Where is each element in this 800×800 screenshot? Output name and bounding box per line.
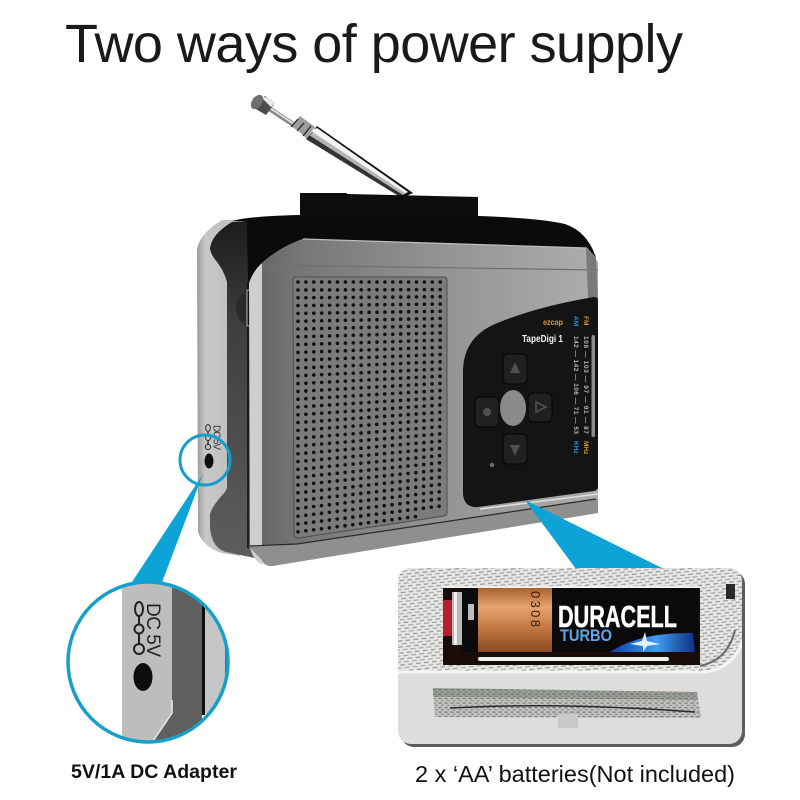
callout: DC jack xyxy=(68,435,230,745)
right bevel xyxy=(586,248,598,300)
AM FM scale: FM xyxy=(582,316,589,325)
button down xyxy=(503,434,527,464)
star xyxy=(630,632,660,652)
control panel xyxy=(463,297,598,507)
tuning dial bar xyxy=(592,335,595,437)
caption: batteries: 2 x ‘AA’ batteries(Not included) xyxy=(415,761,735,787)
indicator led xyxy=(490,463,494,467)
callout wedge xyxy=(130,474,203,585)
magnified jack circle xyxy=(68,580,230,745)
AM FM scale xyxy=(572,316,589,455)
magnifier ring small xyxy=(180,435,230,485)
callout wedge: battery xyxy=(525,500,664,569)
AM FM scale: MHz xyxy=(582,441,589,455)
black top shell xyxy=(232,215,596,282)
front top highlight xyxy=(303,239,587,248)
side panel silver xyxy=(197,220,240,556)
AM FM scale: AM xyxy=(572,316,579,326)
model name: TapeDigi 1 xyxy=(522,333,563,345)
front face xyxy=(262,239,598,566)
side black seam xyxy=(247,282,249,548)
AM FM scale: KHz xyxy=(572,441,579,454)
antenna xyxy=(248,93,413,198)
cassette door top xyxy=(300,193,478,222)
button record xyxy=(475,397,499,427)
front seam line xyxy=(262,265,598,270)
TURBO: TURBO xyxy=(560,626,612,645)
circuit strip xyxy=(433,688,701,728)
center button xyxy=(500,390,526,426)
metal cover texture xyxy=(398,568,742,672)
brand ezcap: ezcap xyxy=(543,317,563,327)
DC jack label small: DC 5V xyxy=(210,425,222,450)
DC jack small xyxy=(204,454,214,468)
AM FM scale: 108 — 103 — 97 — 91 — 87 xyxy=(582,336,589,434)
copper code: 0308 xyxy=(528,591,543,627)
button skip xyxy=(528,393,552,422)
bottom band xyxy=(250,499,598,566)
front highlight strip xyxy=(249,263,264,565)
magnified polarity symbol xyxy=(134,602,144,654)
magnified jack xyxy=(134,663,152,691)
DC jack label small xyxy=(205,425,222,450)
button up xyxy=(503,354,527,384)
caption: DC adapter: 5V/1A DC Adapter xyxy=(71,762,238,783)
battery compartment photo xyxy=(398,568,745,747)
AA battery xyxy=(443,588,698,652)
magnified DC label: DC 5V xyxy=(142,603,163,657)
title: Two ways of power supply xyxy=(65,14,683,74)
AM FM scale: 142 — 142 — 106 — 71 — 53 xyxy=(572,336,579,434)
speaker grill xyxy=(293,277,447,538)
side panel dark xyxy=(210,222,262,560)
side slider switch xyxy=(236,290,251,326)
swoosh xyxy=(610,633,695,652)
brand DURACELL: DURACELL xyxy=(558,599,677,634)
battery cavity xyxy=(443,587,700,665)
radio cassette player xyxy=(197,93,598,566)
